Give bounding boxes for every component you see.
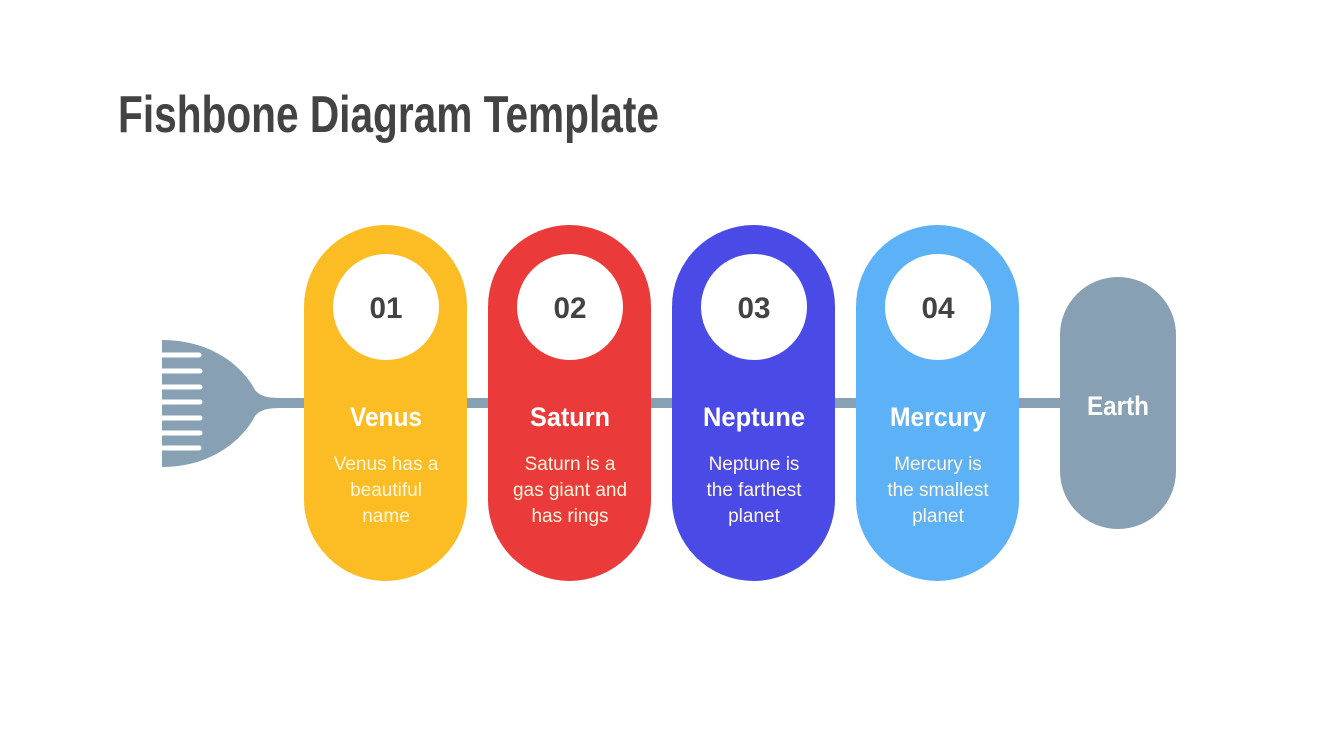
panel: 01 Venus: 01 (370, 292, 402, 325)
panel: Earth head (1060, 277, 1176, 529)
panel: 04 Mercury: 04 (922, 292, 955, 325)
panel: 04 Mercury: planet (912, 506, 965, 527)
panel: 03 Neptune: 03 (738, 292, 770, 325)
panel: 03 Neptune (672, 225, 835, 581)
panel: 04 Mercury (856, 225, 1019, 581)
panel: 01 Venus: Venus (350, 402, 422, 432)
panel: 03 Neptune: Neptune (703, 402, 805, 432)
panel: 02 Saturn (488, 225, 651, 581)
panel: 02 Saturn: 02 (554, 292, 586, 325)
panel: 04 Mercury: Mercury (890, 402, 986, 432)
panel: 03 Neptune: planet (728, 506, 781, 527)
spine line (240, 398, 1080, 408)
icon: fish tail (150, 330, 290, 480)
panel: 03 Neptune: Neptune is (709, 454, 799, 475)
panel: 04 Mercury: the smallest (887, 480, 989, 501)
panel: 03 Neptune: the farthest (706, 480, 802, 501)
panel: 01 Venus: name (362, 506, 410, 527)
panel: 02 Saturn: Saturn is a (525, 454, 616, 475)
panel: 01 Venus: beautiful (350, 480, 422, 501)
panel: 04 Mercury: Mercury is (894, 454, 982, 475)
panel: 01 Venus (304, 225, 467, 581)
panel: 01 Venus: Venus has a (334, 454, 439, 475)
panel: 02 Saturn: Saturn (530, 402, 610, 432)
panel: Earth head: Earth (1087, 391, 1149, 421)
title: Fishbone Diagram Template (118, 86, 659, 144)
panel: 02 Saturn: gas giant and (513, 480, 627, 501)
panel: 02 Saturn: has rings (531, 506, 609, 527)
